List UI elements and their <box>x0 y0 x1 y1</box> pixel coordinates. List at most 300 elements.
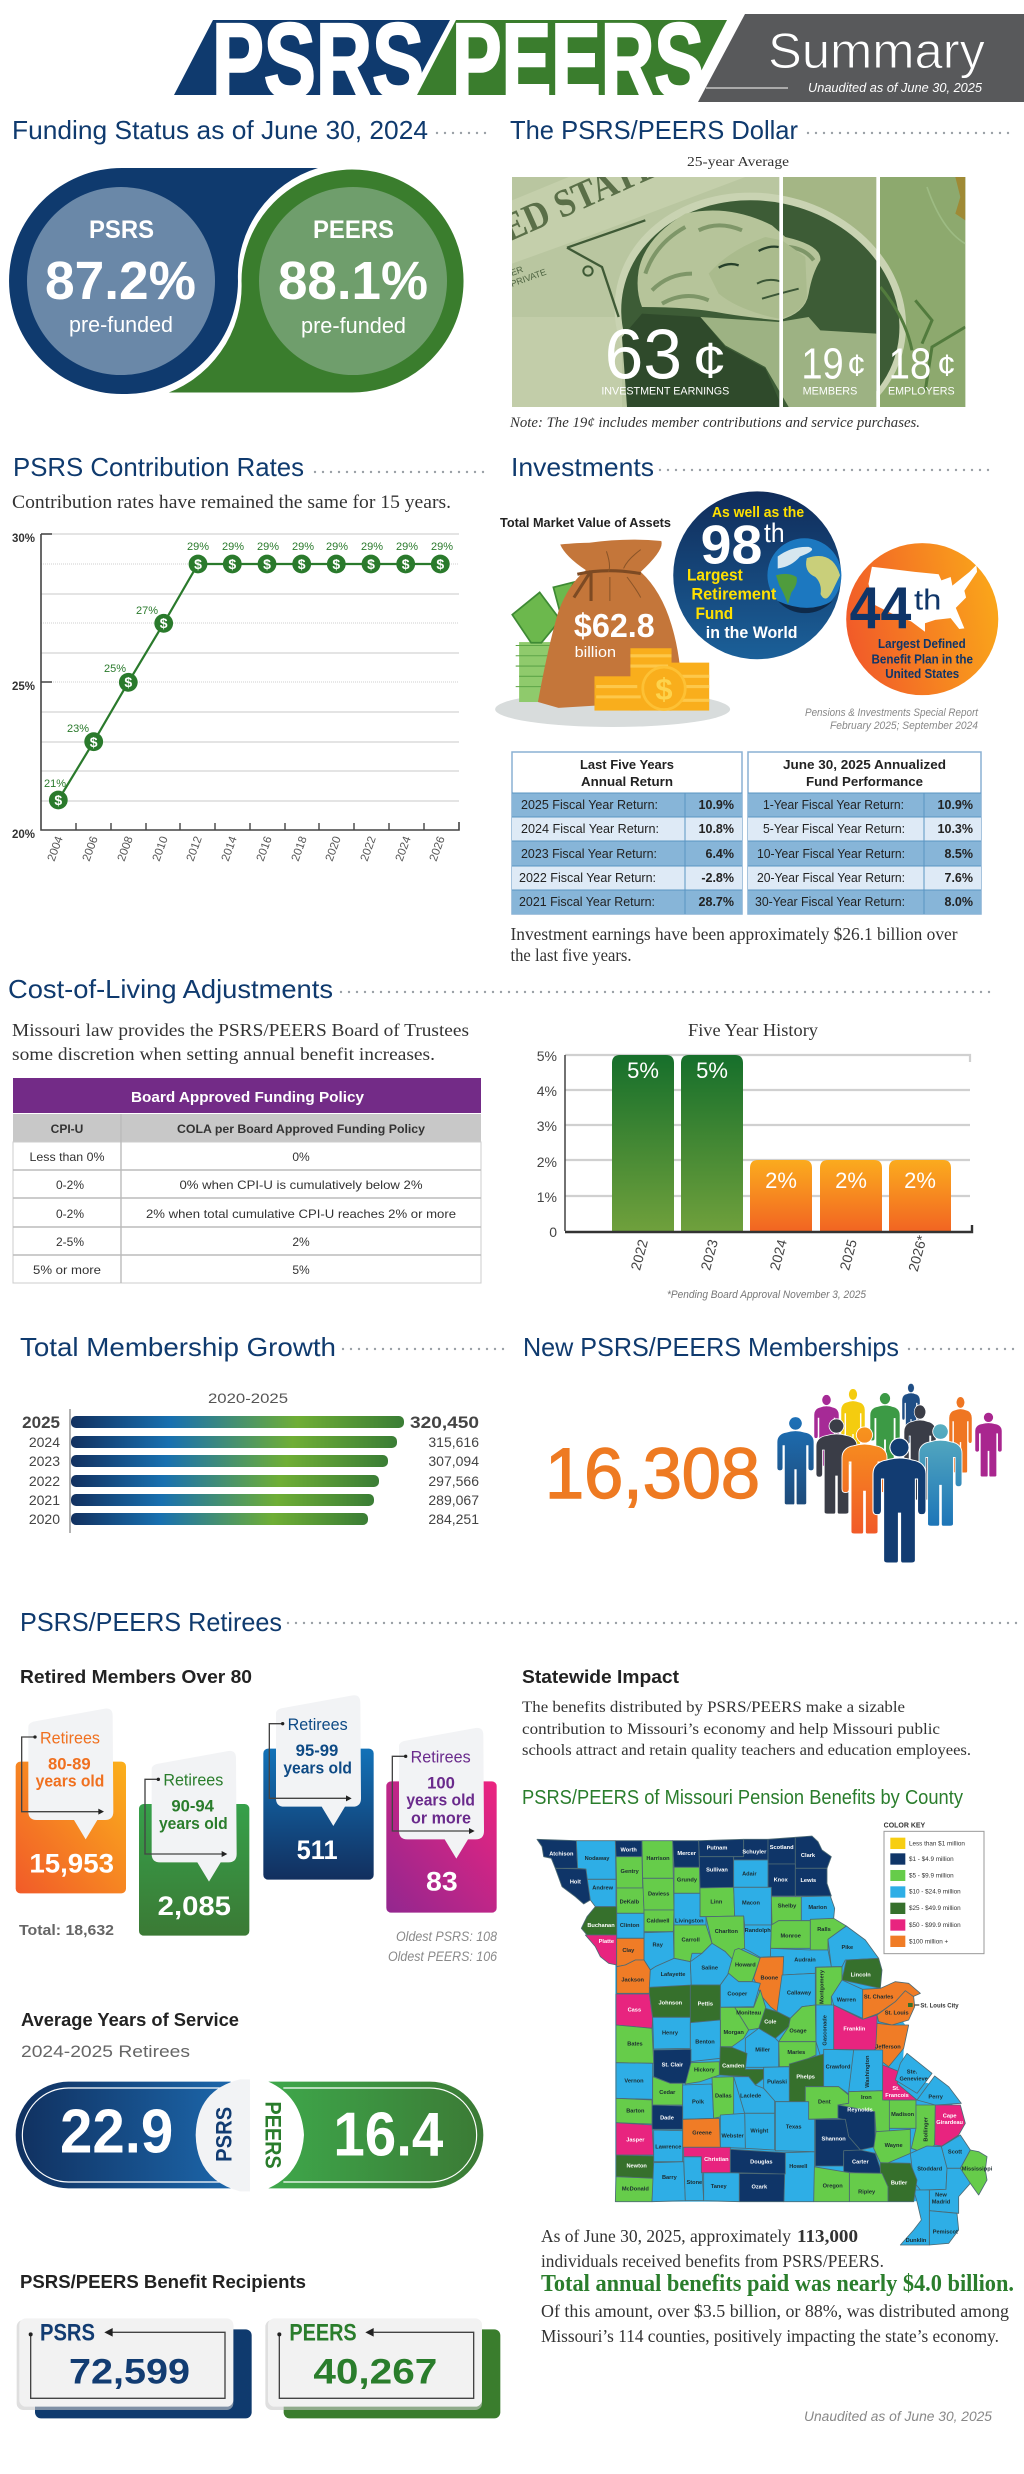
card: 100 years or more: years old <box>406 1791 475 1810</box>
chart: contribution rates line: $ <box>367 556 375 572</box>
text: benefits summary <box>541 2226 1014 2346</box>
card: 100 years or more: 83 <box>426 1867 458 1897</box>
map: Missouri benefits by county: Daviess <box>648 1891 669 1897</box>
badge: 98th largest retirement fund: 98 <box>701 513 762 575</box>
map: Missouri benefits by county: Dade <box>660 2115 674 2121</box>
map: Missouri benefits by county: Christian <box>704 2157 729 2163</box>
pill: PEERS 16.4: 16.4 <box>333 2101 444 2170</box>
map: Missouri benefits by county: Randolph <box>745 1928 771 1934</box>
map: Missouri benefits by county: Pulaski <box>767 2080 787 2086</box>
map: Missouri benefits by county: Grundy <box>677 1877 698 1883</box>
map: Missouri benefits by county: Howard <box>735 1962 756 1968</box>
map: Missouri benefits by county: Ripley <box>858 2189 876 2195</box>
text: investment earnings: Investment earnings have been approximately $26.1 billion over <box>510 924 958 944</box>
map: Missouri benefits by county: Saline <box>701 1966 718 1972</box>
map: Missouri benefits by county: Webster <box>722 2133 745 2139</box>
table: last five years annual return: Last Five Years <box>580 758 674 772</box>
panel: average years pills <box>16 2079 483 2191</box>
map: Missouri benefits by county: Cole <box>764 2019 776 2025</box>
card: PEERS recipients <box>265 2318 500 2418</box>
map: Missouri benefits by county: Iron <box>861 2095 872 2101</box>
chart: membership growth bars: 297,566 <box>428 1473 479 1489</box>
table: board approved funding policy: 0-2% <box>56 1207 84 1221</box>
card: 95-99 years: years old <box>283 1758 352 1777</box>
table: board approved funding policy: 0% when CPI-U is cumulatively below 2% <box>180 1178 423 1192</box>
chart: five year COLA bars: 2025 <box>836 1237 860 1272</box>
card: 95-99 years: Retirees <box>288 1715 348 1734</box>
legend: color key: $10 - $24.9 million <box>909 1889 961 1896</box>
heading: retirees: PSRS/PEERS Retirees <box>20 1607 282 1637</box>
text: statewide impact body: schools attract and retain quality teachers and education employees. <box>522 1742 971 1759</box>
heading: retired members over 80: Retired Members Over 80 <box>20 1667 252 1687</box>
map: Missouri benefits by county: Texas <box>786 2124 801 2130</box>
text: contribution note: Contribution rates have remained the same for 15 years. <box>12 492 451 513</box>
map: Missouri benefits by county: Girardeau <box>936 2120 964 2126</box>
text: statewide impact body: The benefits distributed by PSRS/PEERS make a sizable <box>522 1699 905 1716</box>
map: Missouri benefits by county: Ray <box>652 1942 664 1948</box>
icon: money bag with cash and coins: billion <box>575 644 616 661</box>
panel: dollar photo: PRIVATE <box>509 267 548 289</box>
chart: contribution rates line: 27% <box>136 605 158 617</box>
map: Missouri benefits by county: Moniteau <box>736 2010 762 2016</box>
map: Missouri benefits by county: Phelps <box>796 2075 815 2081</box>
header: summary banner: Summary <box>768 23 985 79</box>
source note: February 2025; September 2024 <box>830 720 978 732</box>
heading: benefits by county: PSRS/PEERS of Missouri Pension Benefits by County <box>522 1787 963 1809</box>
card: 80-89 years: years old <box>36 1772 104 1791</box>
map: Missouri benefits by county: Pettis <box>698 2001 713 2007</box>
legend: color key: COLOR KEY <box>884 1822 926 1829</box>
text: total retirees over 80: Total: 18,632 <box>19 1922 114 1939</box>
panel: dollar photo: ¢ <box>692 332 727 388</box>
table: annualized fund performance: Fund Performance <box>806 775 923 789</box>
map: Missouri benefits by county: Knox <box>774 1877 789 1883</box>
map: Missouri benefits by county: Osage <box>789 2029 807 2035</box>
chart: contribution rates line: $ <box>194 556 202 572</box>
heading: funding status: Funding Status as of June 30, 2024 <box>12 115 428 145</box>
caption: 25-year average: 25-year Average <box>687 155 789 170</box>
map: Missouri benefits by county: Howell <box>789 2164 808 2170</box>
panel: funding status circles: 87.2% <box>45 251 196 311</box>
chart: contribution rates line: $ <box>263 556 271 572</box>
chart: contribution rates line: 2014 <box>220 834 240 863</box>
map: Missouri benefits by county: Andrew <box>592 1885 614 1891</box>
pill: PSRS 22.9 <box>16 2079 250 2191</box>
card: 100 years or more <box>386 1728 497 1913</box>
card: 100 years or more: Retirees <box>411 1748 471 1767</box>
table: board approved funding policy <box>13 1078 481 1283</box>
heading: average years of service <box>21 2010 239 2061</box>
map: Missouri benefits by county: Scotland <box>770 1845 794 1851</box>
text: investment earnings <box>510 924 958 965</box>
panel: funding status circles <box>9 168 465 394</box>
table: annualized fund performance: 10.3% <box>938 822 973 836</box>
badge: 98th largest retirement fund: Retirement <box>691 586 777 604</box>
map: Missouri benefits by county: Marion <box>808 1905 827 1911</box>
table: annualized fund performance: 8.0% <box>944 895 973 909</box>
badge: 98th largest retirement fund: As well as the <box>712 504 804 521</box>
map: Missouri benefits by county: Ozark <box>751 2184 768 2190</box>
chart: contribution rates line: $ <box>298 556 306 572</box>
table: annualized fund performance: 10-Year Fiscal Year Return: <box>757 847 905 861</box>
legend: color key: Less than $1 million <box>909 1840 965 1847</box>
panel: funding status circles: 88.1% <box>278 251 428 311</box>
map: Missouri benefits by county: Barry <box>662 2175 678 2181</box>
map: Missouri benefits by county: Linn <box>710 1900 723 1906</box>
card: 90-94 years <box>139 1751 249 1936</box>
legend: color key: $1 - $4.9 million <box>909 1856 954 1863</box>
map: Missouri benefits by county: Atchison <box>549 1851 574 1857</box>
table: board approved funding policy: 2% when total cumulative CPI-U reaches 2% or more <box>146 1207 456 1221</box>
heading: average years of service: 2024-2025 Retirees <box>21 2042 190 2061</box>
legend: color key: $5 - $9.9 million <box>909 1872 954 1879</box>
chart: contribution rates line: 25% <box>12 681 35 693</box>
map: Missouri benefits by county: Carroll <box>682 1938 700 1944</box>
table: annualized fund performance <box>748 752 981 914</box>
table: last five years annual return: 2024 Fiscal Year Return: <box>521 822 659 836</box>
map: Missouri benefits by county: Genevieve <box>900 2077 928 2083</box>
text: benefits summary: As of June 30, 2025, approximately <box>541 2226 791 2246</box>
table: board approved funding policy: 2-5% <box>56 1235 84 1249</box>
map: Missouri benefits by county: Carter <box>852 2160 869 2166</box>
chart: contribution rates line: 29% <box>361 541 383 553</box>
panel: dollar photo: MEMBERS <box>803 385 857 397</box>
chart: contribution rates line: 23% <box>67 723 89 735</box>
text: oldest members: Oldest PSRS: 108 <box>396 1929 497 1944</box>
badge: 98th largest retirement fund: in the World <box>706 624 798 642</box>
map: Missouri benefits by county: Lewis <box>800 1878 816 1884</box>
chart: membership growth bars: 2020-2025 <box>208 1390 288 1406</box>
table: last five years annual return: 28.7% <box>699 895 734 909</box>
chart: five year COLA bars: 2024 <box>766 1237 790 1272</box>
map: Missouri benefits by county: Johnson <box>659 2001 683 2007</box>
header: summary banner: Unaudited as of June 30, 2025 <box>808 80 983 95</box>
card: 80-89 years: Retirees <box>40 1728 100 1747</box>
badge: 44th largest defined benefit plan <box>846 543 998 695</box>
table: last five years annual return: -2.8% <box>701 871 734 885</box>
map: Missouri benefits by county: Charlton <box>715 1929 738 1935</box>
text: benefits summary: Of this amount, over $3.5 billion, or 88%, was distributed among <box>541 2301 1009 2321</box>
chart: contribution rates line: 2006 <box>81 835 101 863</box>
chart: membership growth bars: 307,094 <box>428 1453 479 1469</box>
map: Missouri benefits by county: Franklin <box>843 2026 866 2032</box>
icon: money bag with cash and coins: $62.8 <box>574 607 655 644</box>
map: Missouri benefits by county: St. <box>892 2086 900 2092</box>
table: last five years annual return <box>512 752 742 914</box>
chart: contribution rates line: $ <box>54 792 62 808</box>
panel: dollar photo: 19 <box>801 340 844 389</box>
chart: contribution rates line: 25% <box>104 663 126 675</box>
chart: contribution rates line: 30% <box>12 533 35 545</box>
chart: contribution rates line: $ <box>332 556 340 572</box>
map: Missouri benefits by county: Madrid <box>932 2200 951 2206</box>
map: Missouri benefits by county: Hickory <box>694 2067 716 2073</box>
chart: contribution rates line: 2020 <box>324 835 344 863</box>
chart: five year COLA bars: 5% <box>537 1048 557 1064</box>
map: Missouri benefits by county: Benton <box>695 2040 715 2046</box>
map: Missouri benefits by county: St. Charles <box>864 1994 893 2000</box>
card: PSRS recipients <box>17 2318 252 2418</box>
card: 95-99 years: 95-99 <box>296 1741 338 1760</box>
chart: contribution rates line: 2008 <box>116 835 136 863</box>
chart: contribution rates line: 21% <box>44 778 66 790</box>
chart: five year COLA bars: 2022 <box>627 1237 651 1272</box>
table: board approved funding policy: COLA per Board Approved Funding Policy <box>177 1122 425 1136</box>
map: Missouri benefits by county: Ralls <box>817 1927 831 1933</box>
map: Missouri benefits by county: Callaway <box>787 1990 812 1996</box>
map: Missouri benefits by county: Clay <box>622 1948 635 1954</box>
heading: average years of service: Average Years of Service <box>21 2010 239 2030</box>
map: Missouri benefits by county: Cedar <box>659 2090 676 2096</box>
card: 80-89 years: 15,953 <box>29 1848 114 1878</box>
map: Missouri benefits by county: Cape <box>943 2113 957 2119</box>
panel: dollar photo: 63 <box>605 315 682 394</box>
chart: contribution rates line: $ <box>124 674 132 690</box>
card: 90-94 years: 2,085 <box>158 1891 231 1921</box>
text: statewide impact body <box>522 1699 971 1759</box>
table: last five years annual return: 10.8% <box>699 822 734 836</box>
map: Missouri benefits by county: Reynolds <box>847 2107 873 2113</box>
pill: PSRS 22.9: PSRS <box>211 2107 236 2162</box>
chart: membership growth bars: 320,450 <box>410 1413 479 1432</box>
map: Missouri benefits by county: Nodaway <box>585 1856 610 1862</box>
header: PSRS/PEERS logotype: PSRS <box>212 2 424 120</box>
chart: membership growth bars: 2021 <box>29 1492 60 1508</box>
chart: contribution rates line: $ <box>436 556 444 572</box>
map: Missouri benefits by county: Gentry <box>621 1869 640 1875</box>
map: Missouri benefits by county: Jasper <box>626 2137 645 2143</box>
chart: contribution rates line: $ <box>90 734 98 750</box>
map: Missouri benefits by county: Perry <box>928 2095 944 2101</box>
chart: five year COLA bars: 3% <box>537 1118 557 1134</box>
map: Missouri benefits by county: Cass <box>628 2008 641 2014</box>
panel: funding status circles: PSRS <box>89 216 154 244</box>
badge: 98th largest retirement fund <box>673 491 841 659</box>
footnote: pending board approval: *Pending Board Approval November 3, 2025 <box>667 1289 867 1301</box>
table: board approved funding policy: 5% or more <box>33 1263 101 1277</box>
card: 80-89 years <box>16 1709 126 1893</box>
chart: five year COLA bars: 5% <box>627 1058 659 1083</box>
table: board approved funding policy: CPI-U <box>51 1122 83 1136</box>
map: Missouri benefits by county: Crawford <box>826 2065 851 2071</box>
chart: contribution rates line <box>12 533 459 863</box>
panel: dollar photo: EMPLOYERS <box>888 385 955 397</box>
table: last five years annual return: 6.4% <box>706 847 734 861</box>
text: missouri law: some discretion when setting annual benefit increases. <box>12 1044 435 1064</box>
footer: unaudited note: Unaudited as of June 30, 2025 <box>804 2409 992 2424</box>
map: Missouri benefits by county: Lafayette <box>661 1972 685 1978</box>
card: 100 years or more: or more <box>411 1808 471 1827</box>
text: missouri law: Missouri law provides the PSRS/PEERS Board of Trustees <box>12 1020 469 1040</box>
card: 90-94 years: 90-94 <box>171 1797 215 1816</box>
map: Missouri benefits by county: McDonald <box>622 2187 649 2193</box>
chart: membership growth bars: 2022 <box>29 1473 60 1489</box>
badge: 98th largest retirement fund: Fund <box>696 605 733 623</box>
panel: dollar photo: 18 <box>889 340 931 389</box>
map: Missouri benefits by county: Holt <box>570 1880 581 1886</box>
map: Missouri benefits by county: Washington <box>865 2055 871 2088</box>
map: Missouri benefits by county: Putnam <box>707 1846 727 1852</box>
map: Missouri benefits by county: Adair <box>742 1872 757 1878</box>
chart: contribution rates line: $ <box>402 556 410 572</box>
heading: cost-of-living adjustments: Cost-of-Living Adjustments <box>8 974 333 1004</box>
card: 90-94 years: Retirees <box>163 1771 223 1790</box>
map: Missouri benefits by county: Newton <box>626 2163 647 2169</box>
chart: five year COLA bars: 0 <box>549 1224 557 1240</box>
chart: five year COLA bars: 2% <box>835 1168 867 1193</box>
map: Missouri benefits by county: Greene <box>692 2130 712 2136</box>
map: Missouri benefits by county: Shannon <box>822 2137 846 2143</box>
card: 95-99 years: 511 <box>297 1835 338 1865</box>
callout: St. Louis City: St. Louis City <box>920 2003 959 2009</box>
text: benefits summary: 113,000 <box>797 2226 858 2246</box>
map: Missouri benefits by county: Platte <box>599 1939 614 1945</box>
map: Missouri benefits by county: Mercer <box>677 1851 697 1857</box>
chart: five year COLA bars: 2% <box>537 1154 557 1170</box>
table: last five years annual return: 2022 Fiscal Year Return: <box>519 871 656 885</box>
map: Missouri benefits by county: Warren <box>837 1998 857 2004</box>
map: Missouri benefits by county: DeKalb <box>620 1900 640 1906</box>
chart: contribution rates line: 29% <box>326 541 348 553</box>
badge: 98th largest retirement fund: th <box>764 518 785 548</box>
map: Missouri benefits by county: Pemiscot <box>933 2229 958 2235</box>
map: Missouri benefits by county: Francois <box>885 2093 909 2099</box>
table: annualized fund performance: 20-Year Fiscal Year Return: <box>757 871 905 885</box>
map: Missouri benefits by county: Jackson <box>621 1978 645 1984</box>
source note <box>805 707 979 732</box>
map: Missouri benefits by county: Sullivan <box>706 1867 728 1873</box>
header: PSRS/PEERS logotype <box>174 2 727 120</box>
chart: contribution rates line: 2018 <box>290 835 310 863</box>
table: annualized fund performance: 5-Year Fiscal Year Return: <box>763 822 905 836</box>
legend: color key <box>884 1822 984 1954</box>
icon: money bag with cash and coins <box>495 540 730 727</box>
badge: 44th largest defined benefit plan: Largest Defined <box>878 637 966 651</box>
map: Missouri benefits by county: Dallas <box>715 2094 732 2100</box>
badge: 98th largest retirement fund: Largest <box>687 566 743 584</box>
map: Missouri benefits by county: Wright <box>750 2128 768 2134</box>
map: Missouri benefits by county: Polk <box>692 2099 705 2105</box>
card: PSRS recipients: PSRS <box>40 2320 95 2347</box>
chart: contribution rates line: 29% <box>222 541 244 553</box>
map: Missouri benefits by county: Harrison <box>646 1856 670 1862</box>
map: Missouri benefits by county: Clark <box>801 1853 816 1859</box>
map: Missouri benefits by county <box>537 1822 993 2245</box>
chart: contribution rates line: 2024 <box>394 834 414 863</box>
map: Missouri benefits by county: Boone <box>761 1975 778 1981</box>
text: investment earnings: the last five years. <box>510 945 632 965</box>
chart: five year COLA bars: 1% <box>537 1189 557 1205</box>
chart: contribution rates line: 2016 <box>255 835 275 863</box>
map: Missouri benefits by county: Camden <box>722 2063 745 2069</box>
chart: five year COLA bars <box>537 1048 972 1273</box>
table: board approved funding policy: 2% <box>292 1235 310 1249</box>
chart: membership growth bars: 284,251 <box>428 1511 479 1527</box>
table: annualized fund performance: June 30, 2025 Annualized <box>783 758 946 772</box>
chart: contribution rates line: 29% <box>257 541 279 553</box>
map: Missouri benefits by county: Douglas <box>750 2160 772 2166</box>
chart: contribution rates line: 2012 <box>185 835 205 863</box>
text: benefits summary: Missouri’s 114 counties, positively impacting the state’s economy. <box>541 2326 999 2346</box>
heading: contribution rates: PSRS Contribution Rates <box>13 452 304 482</box>
table: board approved funding policy: Less than 0% <box>30 1150 105 1164</box>
chart: membership growth bars: 315,616 <box>428 1434 479 1450</box>
icon: globe <box>767 538 841 613</box>
chart: membership growth bars: 2023 <box>29 1453 60 1469</box>
panel: dollar photo: ED STATES <box>494 134 683 250</box>
map: Missouri benefits by county: Laclede <box>740 2094 761 2100</box>
map: Missouri benefits by county: Ste. <box>907 2069 918 2075</box>
map: Missouri benefits by county: Gasconade <box>822 2015 828 2046</box>
panel: funding status circles: pre-funded <box>301 313 406 338</box>
chart: contribution rates line: 20% <box>12 829 35 841</box>
table: board approved funding policy: 0% <box>292 1150 310 1164</box>
card: 80-89 years: 80-89 <box>48 1754 91 1773</box>
table: annualized fund performance: 8.5% <box>944 847 973 861</box>
chart: contribution rates line: $ <box>228 556 236 572</box>
table: annualized fund performance: 30-Year Fiscal Year Return: <box>755 895 905 909</box>
table: last five years annual return: Annual Return <box>581 775 673 789</box>
chart: contribution rates line: 29% <box>431 541 453 553</box>
legend: color key: $100 million + <box>909 1938 949 1945</box>
badge: 44th largest defined benefit plan: 44 <box>850 576 911 641</box>
panel: dollar photo: ¢ <box>937 348 956 382</box>
panel: benefit recipients cards <box>17 2318 500 2418</box>
chart: contribution rates line: 2026 <box>428 835 448 863</box>
chart: contribution rates line: 2010 <box>151 835 171 863</box>
map: Missouri benefits by county: Schuyler <box>742 1850 767 1856</box>
text: statewide impact body: contribution to Missouri’s economy and help Missouri public <box>522 1721 940 1738</box>
source note: Pensions & Investments Special Report <box>805 707 979 719</box>
pill: PEERS 16.4 <box>261 2082 483 2188</box>
heading: dollar: The PSRS/PEERS Dollar <box>510 115 798 145</box>
map: Missouri benefits by county: Lincoln <box>851 1973 871 1979</box>
map: Missouri benefits by county: New <box>935 2193 947 2199</box>
chart: contribution rates line: 2022 <box>359 835 379 863</box>
card: PEERS recipients: PEERS <box>289 2320 357 2347</box>
text: missouri law <box>12 1020 469 1064</box>
label: total market value: Total Market Value of Assets <box>500 515 671 530</box>
chart: membership growth bars <box>22 1390 479 1533</box>
map: Missouri benefits by county: Monroe <box>780 1933 801 1939</box>
map: Missouri benefits by county: Jefferson <box>875 2045 901 2051</box>
chart: membership growth bars: 289,067 <box>428 1492 479 1508</box>
text: oldest members <box>388 1929 497 1964</box>
heading: investments: Investments <box>511 452 654 482</box>
map: Missouri benefits by county: St. Louis <box>885 2010 909 2016</box>
panel: dollar photo: ER <box>509 264 525 278</box>
map: Missouri benefits by county: Livingston <box>675 1918 704 1924</box>
map: Missouri benefits by county: St. Clair <box>662 2063 684 2069</box>
chart: membership growth bars: 2024 <box>29 1434 60 1450</box>
map: Missouri benefits by county: Mississippi <box>962 2167 993 2173</box>
map: Missouri benefits by county: Stoddard <box>917 2166 943 2172</box>
map: Missouri benefits by county: Cooper <box>727 1991 748 1997</box>
header: PSRS/PEERS logotype: PEERS <box>452 2 704 120</box>
map: Missouri benefits by county: Stone <box>686 2180 702 2186</box>
chart: contribution rates line: 29% <box>396 541 418 553</box>
card: 95-99 years <box>263 1695 374 1880</box>
map: Missouri benefits by county: Madison <box>891 2112 915 2118</box>
map: Missouri benefits by county: Morgan <box>723 2030 744 2036</box>
badge: 44th largest defined benefit plan: United States <box>885 667 959 681</box>
panel: dollar photo <box>512 177 966 407</box>
icon: crowd of people <box>777 1384 1002 1563</box>
table: last five years annual return: 2021 Fiscal Year Return: <box>519 895 655 909</box>
map: Missouri benefits by county: Oregon <box>823 2183 843 2189</box>
legend: color key: $50 - $99.9 million <box>909 1922 961 1929</box>
map: Missouri benefits by county: Lawrence <box>655 2145 681 2151</box>
